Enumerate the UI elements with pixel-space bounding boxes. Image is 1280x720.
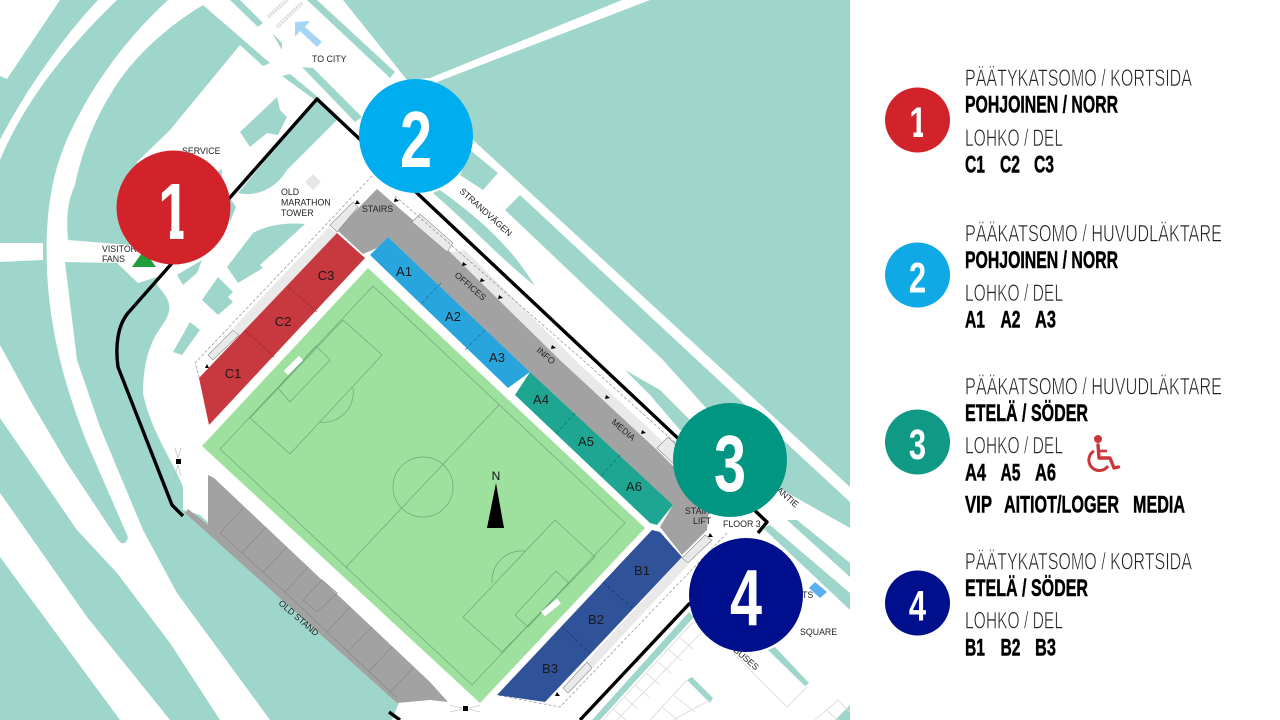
badge 2: 2: [909, 253, 926, 302]
label: old marathon tower: OLD: [281, 187, 299, 197]
panel: stadium map: [0, 0, 850, 720]
icon: visitor entrance: [132, 250, 156, 267]
section block: A1 to A3: A1: [396, 264, 412, 279]
section list 1: C2: [1000, 152, 1020, 178]
section list 2: A1: [965, 306, 985, 334]
old marathon tower marker: [305, 174, 321, 190]
badge 3: 3: [909, 420, 926, 468]
badge 4: 4: [909, 581, 926, 630]
road through the park: [0, 243, 43, 262]
label: offices: OFFICES: [453, 270, 488, 303]
section block: A4 to A6: [515, 372, 673, 525]
parking grid: [603, 622, 850, 720]
icon: north arrow: N: [492, 469, 500, 483]
section list 2: [965, 306, 1056, 334]
section list 4: B2: [1000, 634, 1020, 662]
dashed stand outlines: [195, 176, 727, 707]
label: media: MEDIA: [610, 417, 637, 443]
label: old stand: OLD STAND: [277, 598, 321, 638]
map marker 2: [359, 79, 473, 193]
section list 1: C3: [1034, 152, 1054, 178]
section block: A4 to A6: A4: [533, 392, 549, 407]
map marker 3: [673, 403, 787, 517]
map marker 1: 1: [158, 167, 190, 256]
section list 4: B1: [965, 634, 985, 662]
service marker: [217, 169, 222, 180]
section list 3: A6: [1035, 460, 1056, 486]
section list 2: A2: [1000, 306, 1020, 334]
section block: B stand: [497, 530, 682, 702]
icon: wheelchair: [1089, 435, 1118, 471]
arrow: to city: [268, 0, 322, 47]
facilities list: VIP: [965, 492, 992, 518]
label: visitor fans: FANS: [102, 254, 125, 264]
map marker 3: 3: [714, 419, 746, 508]
label: stairs south: STAIRS: [685, 506, 716, 516]
section list 1: [965, 152, 1054, 178]
badge 4: [885, 570, 950, 636]
map marker 4: [689, 538, 803, 652]
panel: legend: [885, 65, 1222, 662]
section heading 4: LOHKO / DEL: [965, 608, 1063, 634]
badge 3: [885, 410, 950, 474]
label: square: SQUARE: [800, 627, 837, 637]
stand side 4: ETELÄ / SÖDER: [965, 575, 1088, 602]
section block: B stand: B2: [588, 612, 604, 627]
section list 3: [965, 460, 1056, 486]
grey building behind main stand: [337, 189, 710, 555]
section block: B stand: B1: [634, 563, 650, 578]
floodlights: [175, 448, 480, 712]
stand side 1: POHJOINEN / NORR: [965, 92, 1118, 118]
label: info: INFO: [535, 345, 557, 366]
stand side 2: POHJOINEN / NORR: [965, 247, 1118, 274]
legend entry 2: [885, 220, 1222, 334]
icon: north arrow: [487, 469, 504, 528]
label: floor 3: FLOOR 3: [723, 519, 761, 529]
old stand: [185, 475, 448, 703]
label: old marathon tower: MARATHON: [281, 198, 331, 208]
section block: A1 to A3: A2: [445, 309, 461, 324]
label: buses: BUSES: [732, 645, 761, 672]
stand side 3: ETELÄ / SÖDER: [965, 400, 1088, 427]
label: stairs north: STAIRS: [362, 204, 393, 214]
legend entry 3: [885, 374, 1222, 518]
section block: A4 to A6: A6: [626, 479, 642, 494]
facilities list: AITIOT/LOGER: [1004, 492, 1119, 518]
section block: C stand: C1: [225, 366, 241, 381]
section block: A1 to A3: [370, 237, 530, 388]
section list 3: A5: [1000, 460, 1020, 486]
section list 2: A3: [1035, 306, 1056, 334]
map marker 2: 2: [400, 95, 432, 184]
green areas around the stadium: [0, 0, 850, 720]
facilities list: MEDIA: [1133, 492, 1185, 518]
label: antie: ANTIE: [775, 485, 801, 510]
legend entry 4: [885, 548, 1192, 662]
section block: A4 to A6: A5: [578, 434, 594, 449]
section block: C stand: C2: [275, 314, 291, 329]
label: ts: TS: [802, 590, 813, 600]
badge 1: 1: [909, 98, 927, 146]
section heading 1: LOHKO / DEL: [965, 125, 1063, 152]
badge 2: [885, 242, 950, 308]
section block: B stand: B3: [542, 661, 558, 676]
icon: blue marker: [809, 582, 827, 598]
label: strandvägen: STRANDVÄGEN: [458, 186, 514, 238]
map marker 4: 4: [730, 553, 762, 642]
label: service: SERVICE: [182, 146, 221, 156]
direction markers: [205, 198, 713, 696]
section list 4: B3: [1035, 634, 1056, 662]
section list 3: A4: [965, 460, 986, 486]
legend entry 1: [885, 65, 1192, 178]
section list 4: [965, 634, 1056, 662]
section list 1: C1: [965, 152, 985, 178]
label: visitor fans: VISITOR: [102, 244, 137, 254]
section block: C stand: [199, 233, 365, 425]
section heading 3: LOHKO / DEL: [965, 432, 1063, 460]
label: lift: LIFT: [693, 516, 712, 526]
football pitch: [202, 268, 645, 703]
label: old marathon tower: TOWER: [281, 208, 314, 218]
walkway strips and stairs: [208, 202, 712, 693]
badge 1: [885, 88, 950, 152]
label: to city: TO CITY: [312, 54, 347, 64]
boundary line of stadium: [117, 99, 767, 720]
section block: C stand: C3: [318, 268, 334, 283]
section block: A1 to A3: A3: [489, 350, 505, 365]
map marker 1: [116, 150, 230, 264]
section heading 2: LOHKO / DEL: [965, 280, 1063, 307]
